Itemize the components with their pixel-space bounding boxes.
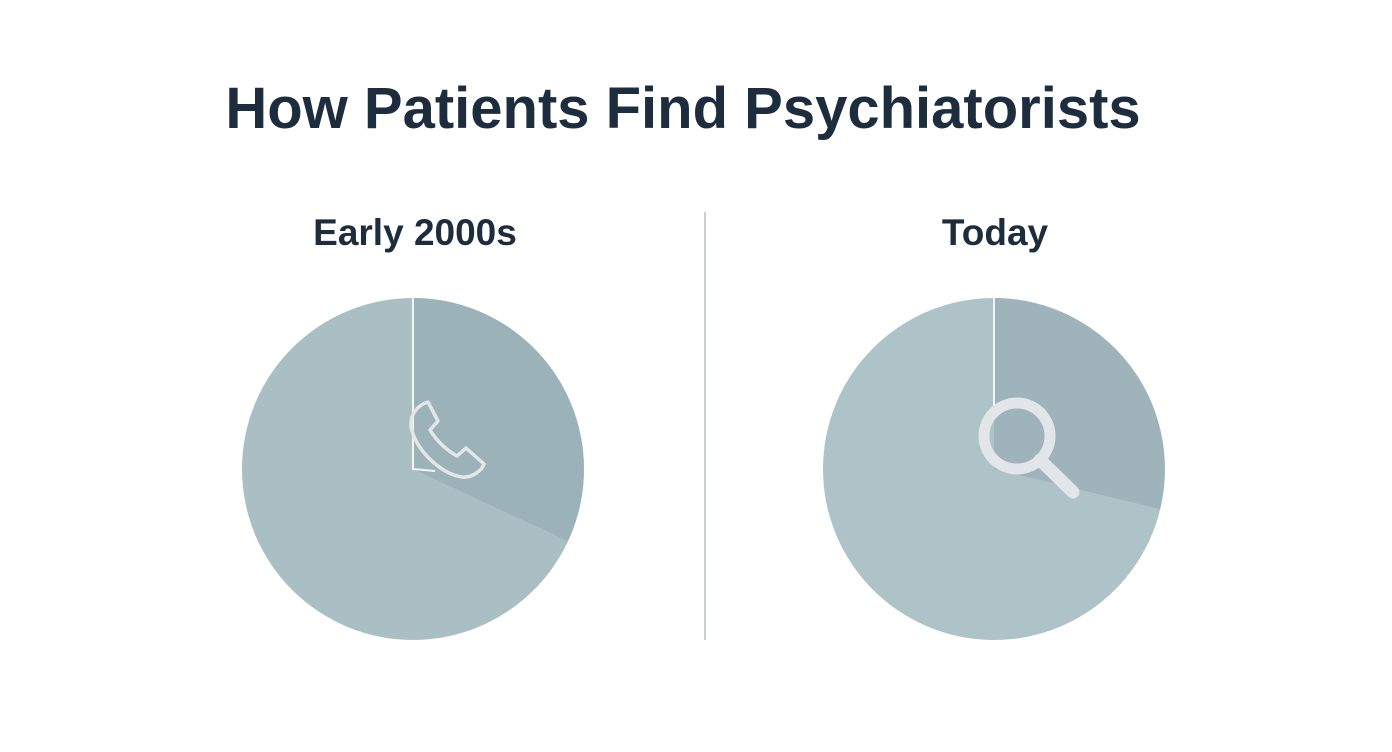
divider line bbox=[704, 212, 706, 640]
pie: early 2000s bbox=[242, 298, 584, 640]
icon: magnifier bbox=[984, 403, 1073, 492]
heading: early 2000s: Early 2000s bbox=[313, 212, 517, 253]
title: How Patients Find Psychiatorists bbox=[225, 76, 1141, 141]
pie: today bbox=[823, 298, 1165, 640]
icon: phone bbox=[411, 402, 484, 477]
heading: today: Today bbox=[942, 212, 1048, 253]
